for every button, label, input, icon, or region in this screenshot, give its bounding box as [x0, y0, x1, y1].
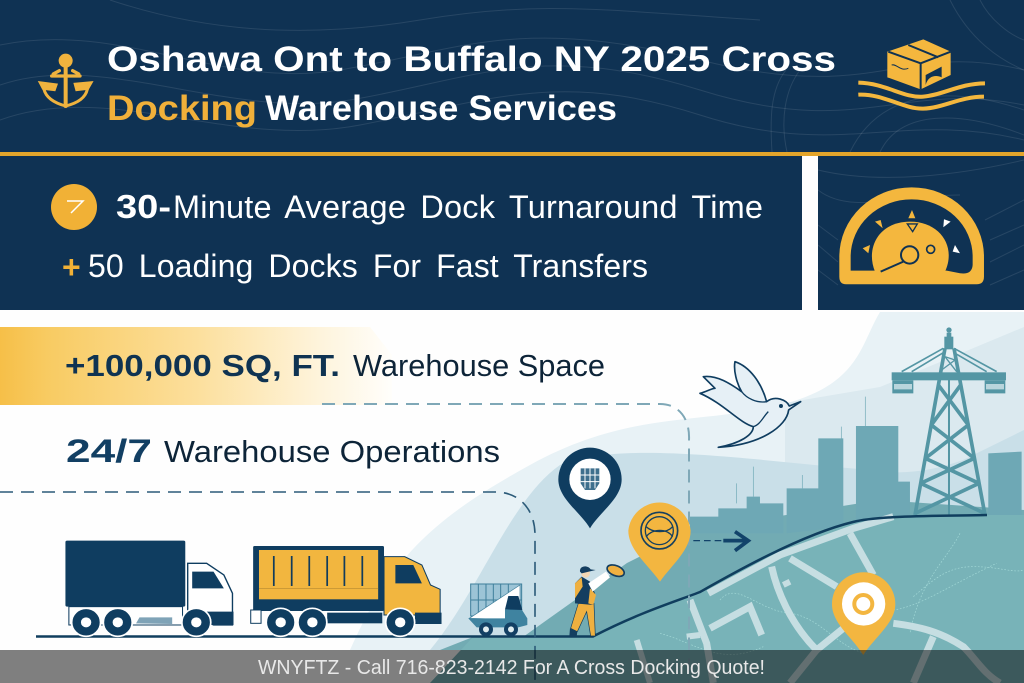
route: dashed upper path	[322, 404, 689, 683]
text: warehouse operations: 24/7	[66, 433, 152, 469]
panel: gauge panel	[818, 156, 1024, 310]
text: loading docks: 50 Loading Docks For Fast Transfers	[88, 248, 648, 284]
heading: title: Oshawa Ont to Buffalo NY 2025 Cross	[107, 40, 836, 79]
arrow: direction arrow	[693, 532, 748, 551]
text: turnaround time: Minute Average Dock Turnaround Time	[173, 189, 763, 225]
chart: skyline	[690, 397, 1022, 533]
icon: navy truck	[65, 541, 234, 636]
panel: header band	[0, 0, 1024, 153]
panel: city scene background	[350, 312, 1024, 650]
text: warehouse operations: Warehouse Operations	[164, 434, 500, 469]
heading: title: Docking	[107, 89, 257, 128]
footer: call to action band: WNYFTZ - Call 716-823-2142 For A Cross Docking Quote!	[258, 657, 765, 679]
icon: forklift	[468, 584, 527, 636]
text: warehouse space	[65, 348, 605, 383]
icon: gold target pin	[832, 572, 895, 655]
icon: anchor	[39, 54, 93, 106]
icon: bird	[700, 362, 801, 447]
route: hill and road map	[36, 515, 1024, 683]
icon: worker	[569, 563, 626, 637]
text: warehouse space: Warehouse Space	[353, 348, 605, 383]
footer: call to action band	[0, 650, 1024, 683]
heading: title	[107, 40, 836, 128]
icon: speed gauge	[839, 187, 984, 284]
icon: gold compass pin	[628, 503, 691, 582]
heading: title: Warehouse Services	[265, 89, 617, 128]
icon: box on waves	[858, 39, 985, 109]
panel: dock stats	[0, 156, 802, 310]
icon: transmission tower	[892, 327, 1006, 515]
divider: gold rule	[0, 152, 1024, 156]
icon: gold clock badge	[51, 184, 97, 230]
icon: navy map pin	[558, 448, 622, 528]
text: turnaround time: 30-	[116, 188, 171, 225]
icon: gold truck	[251, 546, 442, 636]
text: warehouse space: +100,000 SQ, FT.	[65, 348, 340, 383]
panel: warehouse space banner	[0, 327, 605, 405]
route: dashed lower path	[0, 492, 535, 683]
text: loading docks: +	[62, 249, 81, 285]
